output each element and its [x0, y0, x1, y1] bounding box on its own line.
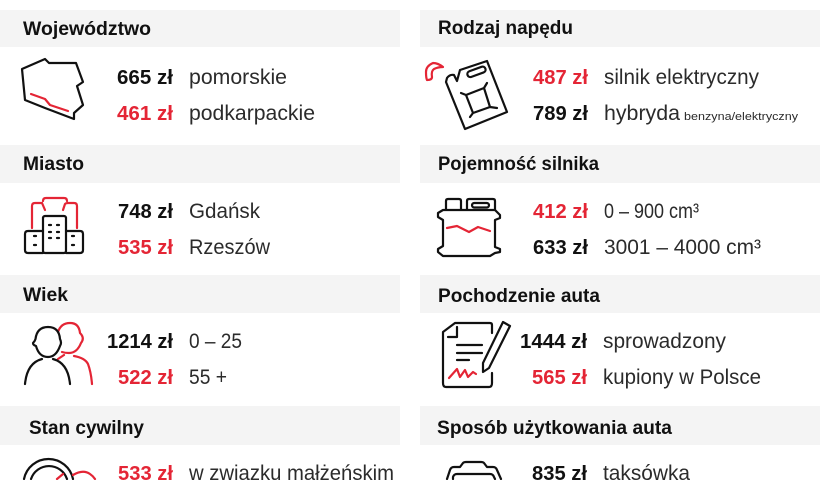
heading: Województwo: Województwo [23, 19, 151, 40]
panel: Wiek [0, 275, 400, 389]
label: 0 – 900 cm³: 0 – 900 cm³ [604, 200, 699, 223]
header bar: Sposób użytkowania auta [420, 406, 820, 445]
header bar: Pojemność silnika [420, 145, 820, 183]
label: Rzeszów: Rzeszów [189, 236, 271, 259]
label: kupiony w Polsce: kupiony w Polsce [603, 366, 761, 389]
label: Gdańsk: Gdańsk [189, 200, 260, 223]
icon: city buildings [25, 198, 83, 253]
heading: Pochodzenie auta: Pochodzenie auta [438, 286, 600, 307]
value: 748 zł: 748 zł [118, 201, 173, 223]
header bar: Stan cywilny [0, 406, 400, 445]
value: 487 zł: 487 zł [533, 67, 588, 89]
icon: engine block [438, 199, 500, 256]
label: hybryda benzyna/elektryczny [604, 102, 799, 125]
panel: Sposób użytkowania auta [420, 406, 820, 480]
icon: fuel canister with drop [426, 61, 507, 129]
panel: Stan cywilny [0, 406, 400, 480]
header bar: Województwo [0, 10, 400, 47]
header bar: Wiek [0, 275, 400, 313]
heading: Miasto: Miasto [23, 154, 84, 175]
heading: Stan cywilny: Stan cywilny [29, 418, 144, 439]
value: 665 zł: 665 zł [117, 67, 173, 89]
panel: Województwo [0, 10, 400, 125]
value: 522 zł: 522 zł [118, 367, 173, 389]
heading: Sposób użytkowania auta: Sposób użytkowania auta [437, 418, 672, 439]
label: 0 – 25: 0 – 25 [189, 330, 242, 353]
value: 1444 zł: 1444 zł [520, 331, 587, 353]
panel: Rodzaj napędu [420, 10, 820, 129]
label: hybryda benzyna/elektryczny: hybryda [604, 102, 680, 125]
value: 633 zł: 633 zł [533, 237, 588, 259]
heading: Wiek: Wiek [23, 285, 68, 306]
value: 1214 zł: 1214 zł [107, 331, 173, 353]
panel: Miasto [0, 145, 400, 259]
label: pomorskie: pomorskie [189, 66, 287, 89]
icon: two people [25, 323, 92, 384]
header bar: Miasto [0, 145, 400, 183]
label: 55 +: 55 + [189, 366, 227, 389]
value: 789 zł: 789 zł [533, 103, 588, 125]
heading: Rodzaj napędu: Rodzaj napędu [438, 18, 573, 39]
label: hybryda benzyna/elektryczny: benzyna/elektryczny [684, 111, 799, 123]
heading: Pojemność silnika: Pojemność silnika [438, 154, 599, 175]
header bar: Rodzaj napędu [420, 10, 820, 47]
icon: document with pen and signature [443, 322, 510, 387]
label: sprowadzony: sprowadzony [603, 330, 726, 353]
icon: map of Poland [22, 59, 83, 119]
label: podkarpackie: podkarpackie [189, 102, 315, 125]
panel: Pochodzenie auta [420, 275, 820, 389]
label: silnik elektryczny: silnik elektryczny [604, 66, 759, 89]
label: 3001 – 4000 cm³: 3001 – 4000 cm³ [604, 236, 761, 259]
value: 461 zł: 461 zł [117, 103, 173, 125]
icon: taxi car [447, 462, 501, 479]
header bar: Pochodzenie auta [420, 275, 820, 313]
panel: Pojemność silnika [420, 145, 820, 259]
value: 412 zł: 412 zł [533, 201, 588, 223]
value: 535 zł: 535 zł [118, 237, 173, 259]
icon: wedding rings [24, 459, 95, 479]
value: 565 zł: 565 zł [532, 367, 587, 389]
